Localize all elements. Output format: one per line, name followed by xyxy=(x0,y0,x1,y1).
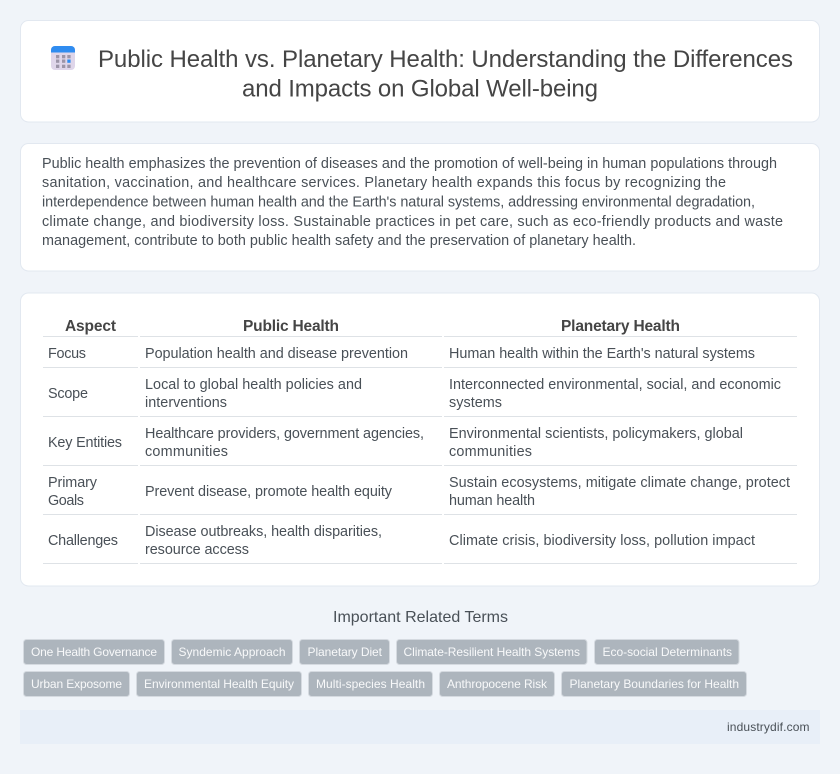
table header row: Public Health xyxy=(243,318,339,335)
row: primary goals: human health xyxy=(449,493,535,509)
row: scope: interventions xyxy=(145,395,227,411)
chip: Planetary Diet: Planetary Diet xyxy=(308,645,383,659)
title: and Impacts on Global Well-being xyxy=(242,76,598,102)
row: focus: Human health within the Earth's natural systems xyxy=(449,346,755,362)
row: focus xyxy=(48,346,755,362)
chip: Planetary Diet xyxy=(300,640,390,664)
chip: One Health Governance: One Health Governance xyxy=(31,645,157,659)
row: challenges: Disease outbreaks, health disparities, xyxy=(145,524,382,540)
row: key entities: Environmental scientists, policymakers, global xyxy=(449,426,743,442)
table header row xyxy=(65,318,680,335)
summary text: interdependence between human health and the Earth's natural systems, addressing environmental degradation, xyxy=(42,194,755,210)
row: key entities: Healthcare providers, government agencies, xyxy=(145,426,424,442)
summary text: sanitation, vaccination, and healthcare services. Planetary health expands this focus by recognizing the xyxy=(42,175,726,191)
chip: Urban Exposome: Urban Exposome xyxy=(31,677,122,691)
summary text: climate change, and biodiversity loss. Sustainable practices in pet care, such as eco-friendly products and waste xyxy=(42,214,783,230)
chip: Multi-species Health: Multi-species Health xyxy=(316,677,425,691)
row: primary goals xyxy=(48,475,790,509)
row: key entities xyxy=(48,426,743,460)
title: Public Health vs. Planetary Health: Understanding the Differences xyxy=(98,46,793,73)
footer: industrydif.com xyxy=(727,720,810,734)
chip: Anthropocene Risk: Anthropocene Risk xyxy=(447,677,548,691)
row: key entities: Key Entities xyxy=(48,435,122,451)
chip: Syndemic Approach: Syndemic Approach xyxy=(178,645,286,659)
row: challenges: Climate crisis, biodiversity loss, pollution impact xyxy=(449,533,755,549)
chip: Anthropocene Risk xyxy=(440,672,554,696)
header panel xyxy=(20,20,820,122)
row: focus: Focus xyxy=(48,346,86,362)
row: challenges: Challenges xyxy=(48,533,118,549)
row: challenges: resource access xyxy=(145,542,249,558)
row: focus: Population health and disease prevention xyxy=(145,346,408,362)
row: primary goals: Primary xyxy=(48,475,98,491)
row: challenges xyxy=(48,524,755,558)
row: scope: Scope xyxy=(48,386,88,402)
row: key entities: communities xyxy=(145,444,228,460)
related terms heading: Important Related Terms xyxy=(333,609,508,626)
chip: Planetary Boundaries for Health: Planetary Boundaries for Health xyxy=(570,677,739,691)
row: key entities: communities xyxy=(449,444,532,460)
chip: Eco-social Determinants xyxy=(594,640,739,664)
row: scope xyxy=(48,377,781,411)
row: scope: Interconnected environmental, social, and economic xyxy=(449,377,781,393)
row: scope: systems xyxy=(449,395,502,411)
chip: Environmental Health Equity xyxy=(136,672,302,696)
summary text: management, contribute to both public health safety and the preservation of planetary health. xyxy=(42,233,636,249)
row: primary goals: Prevent disease, promote health equity xyxy=(145,484,393,500)
icon: calendar xyxy=(51,46,75,70)
chip: One Health Governance xyxy=(24,640,164,664)
chip: Multi-species Health xyxy=(308,672,432,696)
table header row: Aspect xyxy=(65,318,116,335)
summary text xyxy=(42,156,783,249)
chip: Syndemic Approach xyxy=(172,640,292,664)
chip: Environmental Health Equity: Environmental Health Equity xyxy=(144,677,294,691)
panel: summary paragraph xyxy=(20,144,820,271)
row: scope: Local to global health policies and xyxy=(145,377,362,393)
footer xyxy=(20,710,820,744)
chip: Climate-Resilient Health Systems: Climate-Resilient Health Systems xyxy=(404,645,580,659)
panel: comparison table xyxy=(20,293,820,586)
summary text: Public health emphasizes the prevention of diseases and the promotion of well-being in human populations through xyxy=(42,156,777,172)
table header row: Planetary Health xyxy=(561,318,680,335)
title xyxy=(98,46,793,102)
chip: Eco-social Determinants: Eco-social Determinants xyxy=(602,645,732,659)
chip: Planetary Boundaries for Health xyxy=(562,672,746,696)
row: primary goals: Goals xyxy=(48,493,84,509)
chip: Climate-Resilient Health Systems xyxy=(396,640,587,664)
related terms chips xyxy=(24,640,746,696)
row: primary goals: Sustain ecosystems, mitigate climate change, protect xyxy=(449,475,790,491)
chip: Urban Exposome xyxy=(24,672,130,696)
